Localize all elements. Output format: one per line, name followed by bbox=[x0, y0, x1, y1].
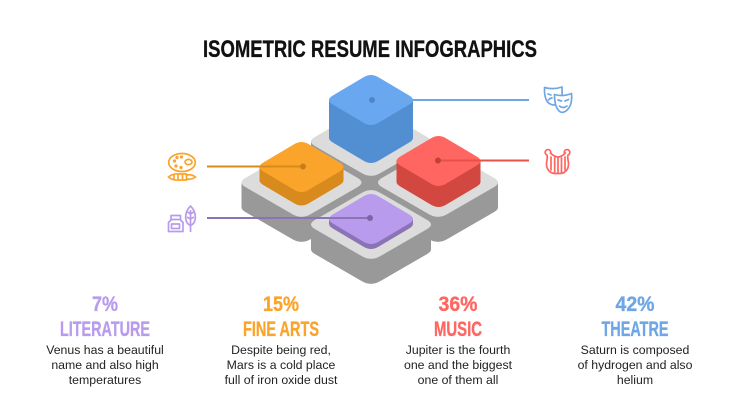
description: theatre: Saturn is composed bbox=[581, 343, 689, 357]
block: theatre (blue) bbox=[329, 75, 413, 163]
column: theatre bbox=[578, 293, 693, 387]
description: music: one and the biggest bbox=[404, 358, 513, 372]
base plate: top bbox=[311, 107, 431, 201]
icon: theatre masks bbox=[544, 87, 572, 112]
heading: theatre: THEATRE bbox=[602, 318, 668, 341]
block: music (red) bbox=[396, 136, 480, 207]
description: fine arts: full of iron oxide dust bbox=[225, 373, 338, 387]
description: theatre: of hydrogen and also bbox=[578, 358, 693, 372]
description: fine arts: Despite being red, bbox=[231, 343, 331, 357]
percent: music: 36% bbox=[438, 293, 478, 316]
percent: fine arts: 15% bbox=[263, 293, 299, 316]
description: music: Jupiter is the fourth bbox=[406, 343, 510, 357]
percent: theatre: 42% bbox=[616, 293, 655, 316]
heading: literature: LITERATURE bbox=[60, 318, 150, 341]
column: music bbox=[404, 293, 513, 387]
base plate: right bbox=[378, 148, 498, 242]
description: music: one of them all bbox=[418, 373, 498, 387]
heading: fine arts: FINE ARTS bbox=[243, 318, 319, 341]
base plate: bottom bbox=[311, 190, 431, 284]
icon: lyre bbox=[545, 150, 570, 174]
connector: literature bbox=[207, 215, 373, 221]
block: fine arts (orange) bbox=[260, 142, 344, 206]
heading: music: MUSIC bbox=[434, 318, 482, 341]
base plate: left bbox=[242, 148, 362, 242]
column: fine arts bbox=[225, 293, 338, 387]
connector: fine arts bbox=[207, 164, 306, 170]
percent: literature: 7% bbox=[92, 293, 118, 316]
description: literature: temperatures bbox=[69, 373, 141, 387]
icon: inkwell and feather bbox=[168, 206, 195, 232]
description: literature: Venus has a beautiful bbox=[46, 343, 164, 357]
title: ISOMETRIC RESUME INFOGRAPHICS bbox=[203, 36, 537, 63]
connector: music bbox=[435, 158, 529, 164]
icon: palette and brush bbox=[168, 154, 196, 180]
column: literature bbox=[46, 293, 164, 387]
description: theatre: helium bbox=[617, 373, 653, 387]
description: literature: name and also high bbox=[51, 358, 159, 372]
block: literature (purple) bbox=[329, 194, 413, 249]
connector: theatre bbox=[369, 97, 529, 103]
description: fine arts: Mars is a cold place bbox=[227, 358, 335, 372]
